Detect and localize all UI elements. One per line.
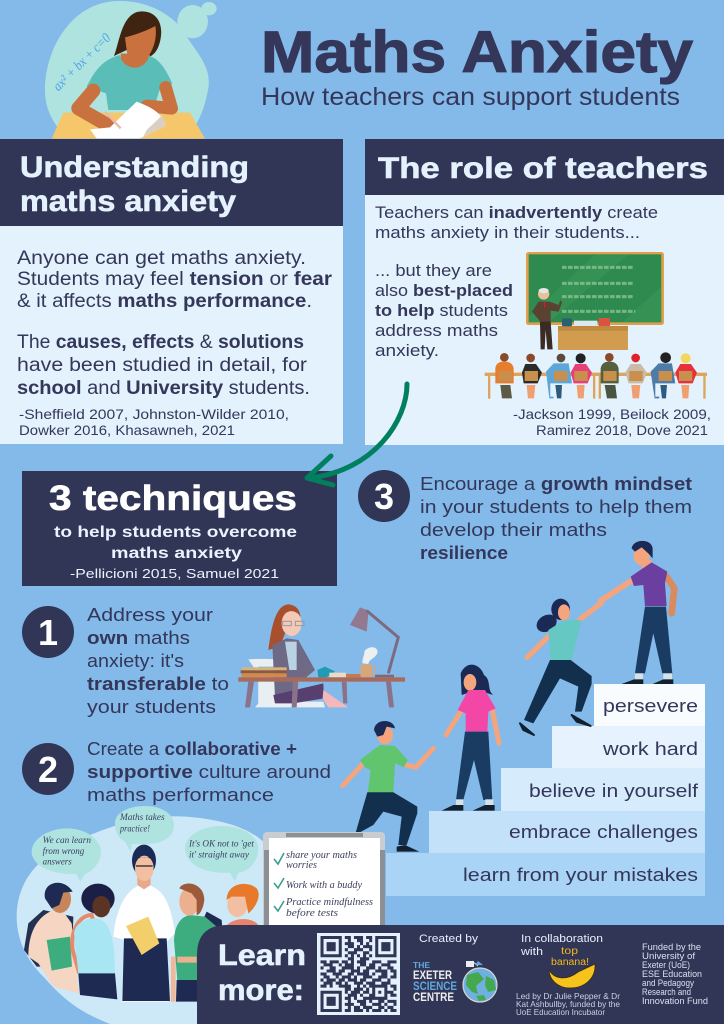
text: best-placed: anxiety. (375, 341, 439, 360)
step: persevere (594, 684, 705, 726)
panel: 3 techniques heading: 3 techniques (49, 479, 297, 518)
panel: the role of teachers (365, 139, 724, 445)
credit: funded by: and Pedagogy (642, 978, 694, 989)
credit: led by: Led by Dr Julie Pepper & Dr (516, 991, 620, 1001)
subtitle: How teachers can support students (261, 83, 680, 111)
speech bubble: learn from wrong answers: answers (43, 857, 72, 867)
learn more label: more: (218, 974, 304, 1007)
illustration: people helping each other up the stairs (343, 541, 674, 852)
speech bubble: ok not to get it: it' straight away (189, 849, 249, 859)
figure: student with backpack and green book (24, 883, 79, 993)
text: growth mindset: resilience (420, 543, 508, 563)
speech bubble: maths takes practice: practice! (119, 823, 150, 833)
step: work hard: work hard (602, 739, 698, 759)
arrow: teachers to techniques (307, 384, 407, 485)
panel heading: understanding: Understanding (20, 151, 249, 184)
figure: student in green shirt (171, 884, 223, 1002)
text: inadvertently: Teachers can inadvertently create (375, 203, 658, 222)
footer: learn more and credits (197, 925, 724, 1024)
citations (513, 406, 711, 438)
step: embrace challenges: embrace challenges (509, 822, 698, 842)
credit: led by (516, 991, 620, 1017)
panel: 3 techniques heading: to help students overcome (54, 524, 297, 541)
whiteboard: coping checklist (263, 832, 385, 932)
credit: led by: UoE Education Incubator (516, 1007, 605, 1017)
citations (19, 406, 289, 438)
logo: exeter science centre: EXETER (413, 968, 452, 982)
panel heading: role of teachers (365, 139, 724, 195)
text: best-placed: address maths (375, 321, 498, 340)
learn more label: Learn (218, 939, 306, 972)
logo: top banana: top (561, 946, 579, 957)
background blob (17, 816, 283, 1024)
text: address your own anxiety: transferable to (87, 674, 229, 694)
title: Maths Anxiety (261, 20, 693, 85)
logo: exeter science centre (413, 961, 457, 1004)
whiteboard: coping checklist: worries (286, 860, 317, 871)
logo: exeter science centre: THE (413, 961, 431, 970)
text: causes effects solutions (17, 332, 310, 399)
credit: in collaboration with (520, 933, 603, 958)
panel heading: role of teachers: The role of teachers (378, 152, 708, 185)
citations: -Sheffield 2007, Johnston-Wilder 2010, (19, 406, 289, 422)
credit: funded by: Innovation Fund (642, 996, 708, 1007)
text: best-placed: ... but they are (375, 261, 492, 280)
logo: top banana: banana! (551, 957, 589, 968)
logo: exeter science centre: SCIENCE (413, 979, 457, 993)
speech bubble: maths takes practice (115, 806, 174, 852)
panel heading: understanding: maths anxiety (20, 185, 236, 218)
illustration: teacher at desk (238, 604, 405, 707)
text: growth mindset: Encourage a growth mindset (420, 474, 692, 494)
whiteboard: coping checklist: before tests (286, 908, 338, 919)
figure: man in purple (601, 541, 674, 684)
technique 3 (358, 470, 692, 563)
text: inadvertently (375, 203, 658, 242)
learn more label (218, 939, 306, 1007)
text: causes effects solutions: school and University students. (17, 378, 310, 399)
text: address your own anxiety: Address your (87, 605, 213, 625)
illustration: student writing maths (45, 1, 217, 139)
speech bubble: ok not to get it (185, 826, 258, 882)
credit: funded by: Research and (642, 987, 691, 998)
text: growth mindset: develop their maths (420, 520, 607, 540)
speech bubble: learn from wrong answers (32, 828, 101, 882)
citations: -Jackson 1999, Beilock 2009, (513, 406, 711, 422)
credit: created by: Created by (419, 933, 479, 945)
step: learn from your mistakes (386, 853, 705, 896)
text: best-placed (375, 261, 513, 360)
technique 2 (22, 739, 331, 805)
step: work hard (552, 726, 705, 768)
figure: man in green (343, 721, 433, 852)
number badge 2: 2 (38, 749, 58, 790)
citations: Dowker 2016, Khasawneh, 2021 (19, 422, 235, 438)
speech bubble: learn from wrong answers: from wrong (43, 846, 85, 856)
text: causes effects solutions: The causes, effects & solutions (17, 332, 304, 353)
illustration: classroom (485, 252, 707, 399)
text: collaborative culture: maths performance (87, 785, 274, 805)
text: address your own anxiety: your students (87, 697, 216, 717)
speech bubble: learn from wrong answers: We can learn (43, 835, 92, 845)
text: best-placed: to help students (375, 301, 508, 320)
credit: in collaboration with: with (520, 946, 543, 958)
whiteboard: coping checklist: Work with a buddy (286, 880, 363, 891)
credit: funded by: ESE Education (642, 969, 702, 980)
credit: funded by (642, 942, 708, 1007)
credit: funded by: Funded by the (642, 942, 701, 953)
figure: woman in teal (520, 599, 602, 735)
figure: teacher in white blouse (113, 845, 175, 1002)
text: collaborative culture (87, 739, 331, 805)
text: growth mindset (420, 474, 692, 563)
whiteboard: coping checklist: Practice mindfulness (285, 897, 373, 908)
text: who gets maths anxiety: Students may feel tension or fear (17, 269, 333, 290)
step: learn from your mistakes: learn from your mistakes (463, 865, 698, 885)
text: growth mindset: in your students to help them (420, 497, 692, 517)
text: collaborative culture: Create a collaborative + (87, 739, 297, 759)
step: believe in yourself (501, 768, 705, 811)
number badge 1: 1 (38, 612, 58, 653)
illustration: student writing maths: ax² + bx + c=0 (51, 31, 114, 94)
whiteboard: coping checklist: share your maths (286, 850, 357, 861)
QR code (317, 933, 400, 1015)
credit: funded by: Exeter (UoE) (642, 960, 690, 971)
logo: top banana (549, 946, 595, 988)
credit: funded by: University of (642, 951, 695, 962)
citations: Ramirez 2018, Dove 2021 (536, 422, 708, 438)
icon: globe with flag (463, 961, 497, 1002)
panel: 3 techniques heading (22, 471, 337, 586)
credit: in collaboration with: In collaboration (521, 933, 603, 945)
panel: 3 techniques heading: -Pellicioni 2015, Samuel 2021 (70, 566, 279, 581)
number badge 3: 3 (374, 476, 394, 517)
step: persevere: persevere (603, 696, 698, 716)
text: who gets maths anxiety: Anyone can get maths anxiety. (17, 248, 306, 269)
text: collaborative culture: supportive culture around (87, 762, 331, 782)
number badge 3 (358, 470, 410, 522)
text: inadvertently: maths anxiety in their students... (375, 223, 640, 242)
technique 1 (22, 605, 229, 717)
text: best-placed: also best-placed (375, 281, 513, 300)
text: address your own anxiety: own maths (87, 628, 190, 648)
figure: girl with orange hair (226, 884, 259, 927)
text: address your own anxiety (87, 605, 229, 717)
number badge 1 (22, 606, 74, 658)
text: causes effects solutions: have been studied in detail, for (17, 355, 308, 376)
step: embrace challenges (429, 811, 705, 853)
speech bubble: ok not to get it: It's OK not to 'get (188, 839, 254, 849)
panel: understanding maths anxiety (0, 139, 343, 444)
text: who gets maths anxiety (17, 248, 333, 312)
figure: student with orange backpack (72, 884, 117, 999)
number badge 2 (22, 743, 74, 795)
illustration: teacher and students with speech bubbles (17, 806, 283, 1024)
credit: led by: Kat Ashbullby, funded by the (516, 999, 620, 1009)
speech bubble: maths takes practice: Maths takes (119, 812, 165, 822)
logo: exeter science centre: CENTRE (413, 990, 454, 1004)
panel heading: understanding (0, 139, 343, 226)
text: who gets maths anxiety: & it affects maths performance . (17, 291, 312, 312)
step: believe in yourself: believe in yourself (529, 781, 699, 801)
staircase of growth mindset steps (386, 684, 705, 896)
figure: woman in pink (442, 665, 499, 811)
panel: 3 techniques heading: maths anxiety (111, 545, 242, 562)
text: address your own anxiety: anxiety: it's (87, 651, 184, 671)
